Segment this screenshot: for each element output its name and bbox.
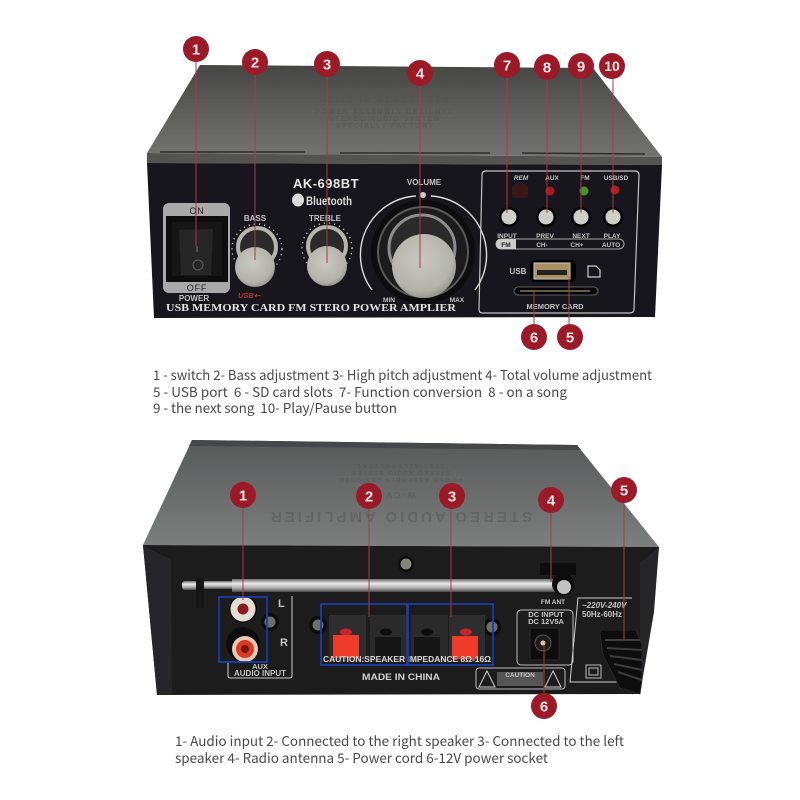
- callout 1: 1: [192, 42, 200, 58]
- callout 4: [538, 487, 564, 582]
- top cover: POWER ASSEMBLY DESIGNED: [315, 109, 455, 116]
- callout 1: [183, 36, 209, 246]
- callout 8: 8: [543, 60, 551, 76]
- front legend text: 5 - USB port 6 - SD card slots 7- Function conversion 8 - on a song: [153, 381, 567, 401]
- callout 3: 3: [448, 488, 456, 506]
- rear amplifier photo: [143, 440, 659, 695]
- button labels: AUTO: [602, 242, 620, 249]
- top cover: SPECIALLY FACTORY: [335, 123, 435, 130]
- fm antenna label: FM ANT: [541, 599, 565, 606]
- rear legend text: [175, 730, 624, 767]
- power switch: [163, 203, 230, 303]
- callout 4: [407, 60, 433, 268]
- button labels: CH-: [536, 242, 548, 249]
- made in china: MADE IN CHINA: [362, 672, 440, 683]
- rear legend text: speaker 4- Radio antenna 5- Power cord 6-12V power socket: [175, 747, 548, 767]
- front legend text: [153, 364, 652, 417]
- power switch: ON: [189, 206, 205, 216]
- antenna: [182, 563, 576, 608]
- front amplifier photo: [147, 65, 662, 318]
- bass knob: [232, 214, 282, 287]
- callout 6: 6: [540, 698, 548, 716]
- callout 5: [611, 477, 637, 640]
- push buttons: [499, 207, 623, 227]
- power switch: OFF: [187, 283, 207, 293]
- top cover: BUILT-IN BLUETOOTH: [319, 94, 451, 104]
- rear legend text: 1- Audio input 2- Connected to the right speaker 3- Connected to the left: [175, 730, 624, 750]
- top cover rear: STEREO AUDIO AMPLIFIER: [268, 508, 532, 525]
- control panel: [479, 171, 639, 313]
- aux panel: AUX: [252, 662, 268, 671]
- top cover rear: POWER ASSEMBLY DESIGNED: [338, 476, 462, 482]
- speaker terminals: [323, 615, 491, 664]
- callout 4: 4: [416, 66, 425, 82]
- top cover rear: SPECIALLY FACTORY: [356, 462, 444, 468]
- dc input: DC 12V5A: [528, 617, 565, 626]
- callout 2: [356, 483, 382, 617]
- front panel slogan: USB MEMORY CARD FM STERO POWER AMPLIER: [166, 303, 456, 314]
- callout 9: 9: [577, 58, 585, 76]
- front panel: [147, 163, 662, 318]
- speaker terminals: CAUTION:SPEAKER IMPEDANCE 8Ω-16Ω: [323, 654, 491, 664]
- callout 5: 5: [620, 482, 628, 500]
- bass knob: BASS: [244, 214, 267, 223]
- caution plate: [476, 668, 565, 689]
- callout 2: 2: [365, 488, 373, 506]
- callout 2: 2: [251, 54, 259, 72]
- callouts: front panel: [183, 36, 625, 350]
- callout 7: 7: [503, 58, 511, 74]
- callout 3: 3: [323, 56, 331, 74]
- memory card slot: MEMORY CARD: [526, 302, 584, 311]
- aux panel: L: [278, 598, 285, 610]
- callout 6: [521, 291, 547, 350]
- top cover: HI-FI DIGITAL AUDIO AMPLIFIER: [274, 80, 486, 90]
- aux panel: AUDIO INPUT: [234, 669, 286, 678]
- callout 3: [439, 483, 465, 617]
- usb port: USB: [510, 267, 527, 276]
- callout 5: 5: [566, 330, 574, 346]
- treble knob: [302, 214, 352, 286]
- button labels: FM: [501, 242, 511, 249]
- voltage panel: [570, 598, 632, 682]
- callout 9: [568, 53, 594, 213]
- power cord: [600, 630, 642, 694]
- memory card slot: [514, 287, 598, 311]
- dc input: [517, 610, 573, 665]
- front legend text: 1 - switch 2- Bass adjustment 3- High pitch adjustment 4- Total volume adjustment: [153, 364, 652, 384]
- front legend text: 9 - the next song 10- Play/Pause button: [153, 397, 397, 417]
- model and bluetooth label: Bluetooth: [306, 194, 352, 208]
- callout 2: [242, 49, 268, 260]
- voltage panel: 50Hz-60Hz: [582, 610, 622, 619]
- usb logo: USB⇠: [238, 291, 261, 300]
- callout 3: [314, 51, 340, 263]
- volume knob: MAX: [450, 297, 465, 304]
- blue highlight boxes: [219, 597, 493, 665]
- top cover rear: [143, 440, 659, 547]
- volume knob: MIN: [383, 297, 395, 304]
- top cover: STEREO AUDIO SYSTEM: [329, 116, 441, 123]
- aux panel: [228, 596, 292, 678]
- button labels: PLAY: [604, 233, 621, 240]
- callout 6: [531, 645, 557, 719]
- button labels: [496, 233, 624, 249]
- screw top: [398, 556, 414, 572]
- caution plate: CAUTION: [505, 672, 535, 679]
- indicator labels: [514, 175, 629, 182]
- button labels: PREV: [536, 233, 555, 240]
- button labels: NEXT: [572, 233, 590, 240]
- callout 8: [534, 54, 560, 213]
- indicator labels: FM: [580, 175, 590, 182]
- callout 1: 1: [239, 488, 247, 504]
- indicator labels: REM: [514, 175, 529, 182]
- volume knob: [360, 178, 487, 304]
- volume knob: VOLUME: [407, 178, 442, 187]
- dc input: DC INPUT: [528, 610, 564, 619]
- top cover rear: STEREO AUDIO SYSTEM: [350, 469, 450, 475]
- sd icon: [588, 266, 600, 277]
- treble knob: TREBLE: [309, 214, 342, 223]
- indicator labels: USB/SD: [604, 175, 629, 182]
- callout 10: 10: [604, 58, 620, 74]
- screws: [261, 613, 501, 636]
- callout 1: [230, 482, 256, 600]
- rear panel: [143, 545, 659, 695]
- callouts: rear panel: [230, 477, 637, 719]
- callout 4: 4: [547, 492, 556, 510]
- usb port: [510, 260, 576, 282]
- callout 10: [599, 53, 625, 213]
- callout 7: [494, 52, 520, 213]
- button labels: CH+: [570, 242, 584, 249]
- top cover: [147, 65, 662, 165]
- power switch: POWER: [179, 294, 209, 303]
- model and bluetooth label: AK-698BT: [293, 176, 359, 191]
- indicator lights: [512, 184, 620, 198]
- model and bluetooth label: [292, 176, 359, 208]
- rca jacks: [226, 595, 260, 662]
- button labels: INPUT: [497, 233, 517, 240]
- aux panel: R: [280, 637, 288, 649]
- callout 6: 6: [530, 330, 538, 346]
- callout 5: [557, 277, 583, 350]
- top cover rear: W-CV: [384, 490, 416, 500]
- indicator labels: AUX: [545, 175, 560, 182]
- voltage panel: ~220V-240V: [582, 601, 627, 610]
